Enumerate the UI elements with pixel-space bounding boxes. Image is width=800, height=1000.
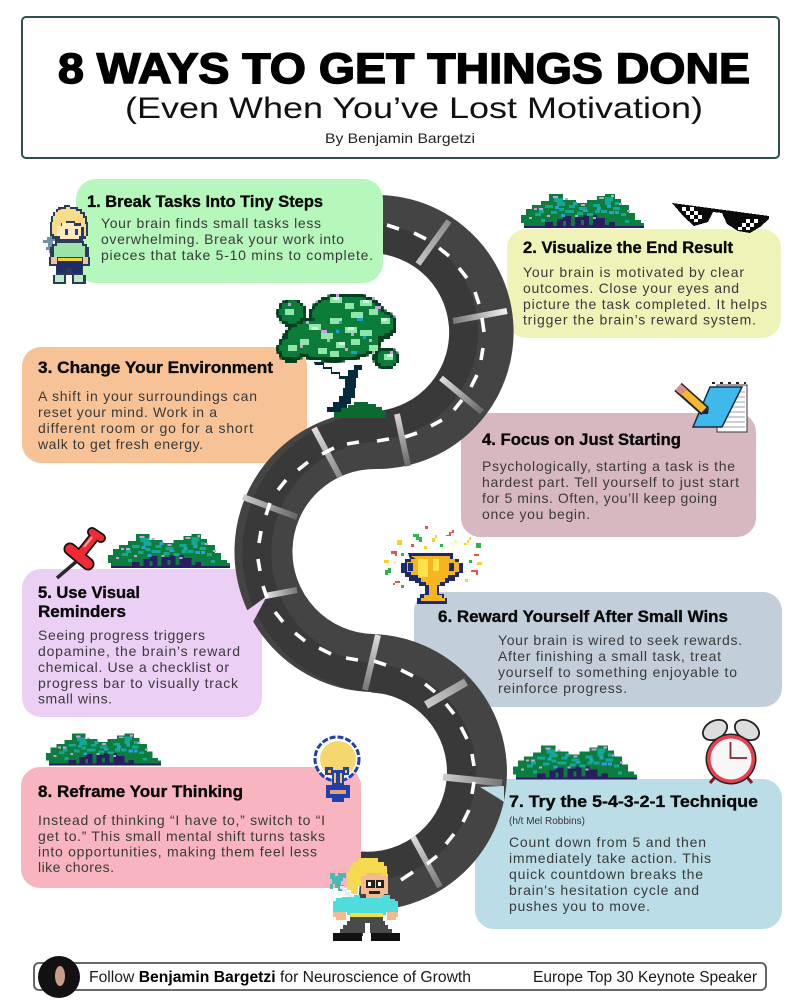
avatar — [38, 956, 80, 998]
icon: pixel boy — [43, 205, 90, 284]
darker lane shading — [257, 239, 464, 866]
clock hands — [730, 742, 747, 758]
icon: tree — [277, 293, 399, 418]
blue sheet — [693, 387, 742, 427]
spiral binding — [712, 382, 746, 384]
road segment joints — [243, 221, 507, 887]
trophy outline — [401, 553, 463, 604]
body text: overwhelming. Break your work into — [101, 231, 344, 247]
body text: different room or go for a short — [38, 420, 253, 436]
body text: outcomes. Close your eyes and — [523, 280, 739, 296]
frame — [672, 203, 769, 233]
panel 1: break tasks into tiny steps — [76, 179, 383, 283]
centre line dashes — [258, 225, 484, 880]
body text — [523, 264, 767, 328]
panel 2: visualize the end result — [507, 229, 781, 338]
body text: picture the task completed. It helps — [523, 296, 767, 312]
icon: trophy and confetti — [384, 526, 482, 604]
eyes — [65, 229, 78, 235]
body text: trigger the brain’s reward system. — [523, 312, 756, 328]
head outline — [50, 205, 88, 242]
body text — [482, 458, 739, 522]
clock ring — [707, 735, 755, 783]
avatar background — [38, 956, 80, 998]
body text: Seeing progress triggers — [38, 627, 205, 643]
boots — [333, 933, 400, 941]
body text: Psychologically, starting a task is the — [482, 458, 735, 474]
hands — [51, 257, 88, 264]
follow text: Follow Benjamin Bargetzi for Neuroscience of Growth — [89, 969, 471, 986]
body text: for 5 mins. Often, you’ll keep going — [482, 490, 717, 506]
avatar face — [55, 966, 65, 986]
yellow fill — [320, 741, 356, 777]
title panel — [22, 17, 779, 158]
footer bar — [34, 956, 766, 998]
body text — [101, 215, 373, 263]
boots — [55, 275, 83, 282]
hands — [333, 912, 398, 920]
outlines — [70, 532, 101, 564]
body text: Your brain is motivated by clear — [523, 264, 744, 280]
glass — [315, 737, 359, 781]
body text: quick countdown breaks the — [509, 866, 703, 882]
icon: bush above card 5 — [108, 534, 230, 568]
card background — [22, 347, 307, 463]
pencil outline — [678, 387, 705, 411]
salmon stripe — [330, 790, 346, 794]
filament gold — [328, 770, 347, 783]
icon: pixel sunglasses — [672, 203, 769, 233]
body text: brain's hesitation cycle and — [509, 882, 699, 898]
icon: pixel hero — [330, 858, 400, 941]
icon: light bulb — [315, 737, 359, 802]
body text: small wins. — [38, 690, 112, 706]
heading — [38, 583, 140, 621]
body text — [37, 388, 257, 452]
shirt — [54, 243, 85, 257]
trophy cup — [407, 556, 459, 601]
canopy — [277, 293, 399, 369]
grass mound — [334, 402, 386, 418]
panel 7: try the 5-4-3-2-1 technique — [475, 779, 782, 929]
pixel glints — [682, 207, 758, 230]
icon: notepad and pencil — [678, 383, 747, 432]
hair — [347, 858, 388, 894]
body text — [38, 627, 240, 706]
panel 3: change your environment — [22, 347, 307, 463]
body text: pieces that take 5-10 mins to complete. — [101, 247, 373, 263]
body text: progress bar to visually track — [38, 675, 239, 691]
body text: dopamine, the brain’s reward — [38, 643, 240, 659]
heading: 7. Try the 5-4-3-2-1 Technique — [509, 792, 758, 811]
clock face — [710, 738, 752, 780]
hair — [52, 207, 86, 236]
body text: yourself to something enjoyable to — [498, 664, 737, 680]
pencil body — [684, 392, 704, 410]
body text: reinforce progress. — [498, 680, 627, 696]
card background — [507, 229, 781, 338]
body outline — [49, 241, 90, 284]
shine — [84, 537, 92, 547]
heading: 1. Break Tasks Into Tiny Steps — [87, 192, 323, 211]
belt — [58, 258, 82, 261]
bells — [699, 716, 763, 744]
panel 6: reward yourself after small wins — [414, 592, 782, 707]
confetti — [384, 526, 482, 588]
page lines — [720, 392, 745, 427]
card background — [22, 569, 262, 717]
card background — [461, 413, 756, 537]
panel 4: focus on just starting — [461, 413, 756, 537]
byline: By Benjamin Bargetzi — [325, 130, 475, 146]
icon: bush above card 2 — [521, 194, 644, 228]
body text: Your brain finds small tasks less — [101, 215, 321, 231]
body text: pushes you to move. — [509, 898, 650, 914]
tip — [702, 407, 709, 414]
body text: get to.” This small mental shift turns tasks — [38, 828, 325, 844]
filament — [325, 767, 349, 785]
eyes — [366, 880, 384, 888]
card background — [21, 767, 361, 888]
heading: 6. Reward Yourself After Small Wins — [438, 607, 728, 626]
body text: hardest part. Tell yourself to just start — [482, 474, 739, 490]
bush above card 8 — [46, 734, 161, 765]
tip — [332, 798, 344, 802]
heading: 5. Use Visual — [38, 583, 140, 602]
heading: 8. Reframe Your Thinking — [38, 782, 243, 801]
title: 8 WAYS TO GET THINGS DONE — [58, 45, 750, 93]
body text — [38, 812, 325, 875]
road notch at card 5 — [238, 596, 267, 630]
red parts — [70, 532, 101, 564]
blue pixels — [336, 318, 367, 354]
sword guard — [330, 873, 346, 891]
shirt — [333, 895, 398, 915]
body text: Count down from 5 and then — [509, 834, 706, 850]
icon: bush above card 7 — [513, 745, 637, 780]
title frame — [22, 17, 779, 158]
trunk — [314, 362, 362, 412]
body text: like chores. — [38, 859, 114, 875]
body text: Instead of thinking “I have to,” switch to “I — [38, 812, 325, 828]
body text: After finishing a small task, treat — [498, 648, 721, 664]
pencil — [678, 387, 709, 414]
subtitle: (Even When You’ve Lost Motivation) — [125, 92, 703, 125]
body text — [498, 632, 742, 696]
belt — [350, 913, 383, 917]
trophy highlight — [418, 559, 439, 577]
attribution: (h/t Mel Robbins) — [509, 816, 585, 827]
heading: Reminders — [38, 602, 126, 621]
body text: chemical. Use a checklist or — [38, 659, 229, 675]
body text: Your brain is wired to seek rewards. — [498, 632, 742, 648]
road notch at card 7 — [480, 786, 504, 802]
sword blade — [340, 886, 353, 898]
body text: into opportunities, making them feel less — [38, 844, 317, 860]
eraser — [678, 387, 684, 392]
icon: push pin — [57, 532, 101, 578]
footer pill — [34, 963, 766, 990]
heading: 4. Focus on Just Starting — [482, 430, 681, 449]
road surface — [263, 224, 485, 881]
body text: reset your mind. Work in a — [38, 404, 217, 420]
body text: A shift in your surroundings can — [38, 388, 257, 404]
needle — [57, 561, 77, 578]
pants — [57, 261, 82, 273]
body text: walk to get fresh energy. — [37, 436, 203, 452]
body text: immediately take action. This — [509, 850, 711, 866]
keynote text: Europe Top 30 Keynote Speaker — [533, 969, 757, 986]
body text — [509, 834, 711, 914]
canopy highlights — [286, 296, 393, 360]
collar — [326, 785, 350, 798]
item — [43, 235, 56, 253]
face — [361, 873, 388, 898]
face — [57, 223, 81, 239]
heading: 3. Change Your Environment — [38, 358, 273, 377]
heading: 2. Visualize the End Result — [523, 238, 733, 257]
card background — [475, 779, 782, 929]
clock outline — [706, 734, 756, 784]
card background — [414, 592, 782, 707]
winding road — [238, 221, 507, 887]
pants — [336, 917, 396, 936]
blossoms — [289, 294, 392, 354]
trophy handle holes — [408, 563, 454, 571]
mouth — [369, 891, 380, 894]
lined page — [717, 385, 747, 432]
feet — [710, 776, 752, 783]
canopy light spots — [312, 297, 392, 358]
body text: once you begin. — [482, 506, 590, 522]
panel 5: use visual reminders — [22, 569, 262, 717]
panel 8: reframe your thinking — [21, 767, 361, 888]
canopy shadow — [277, 293, 399, 369]
icon: alarm clock — [699, 716, 763, 784]
card background — [76, 179, 383, 283]
canopy leaves — [280, 296, 397, 366]
